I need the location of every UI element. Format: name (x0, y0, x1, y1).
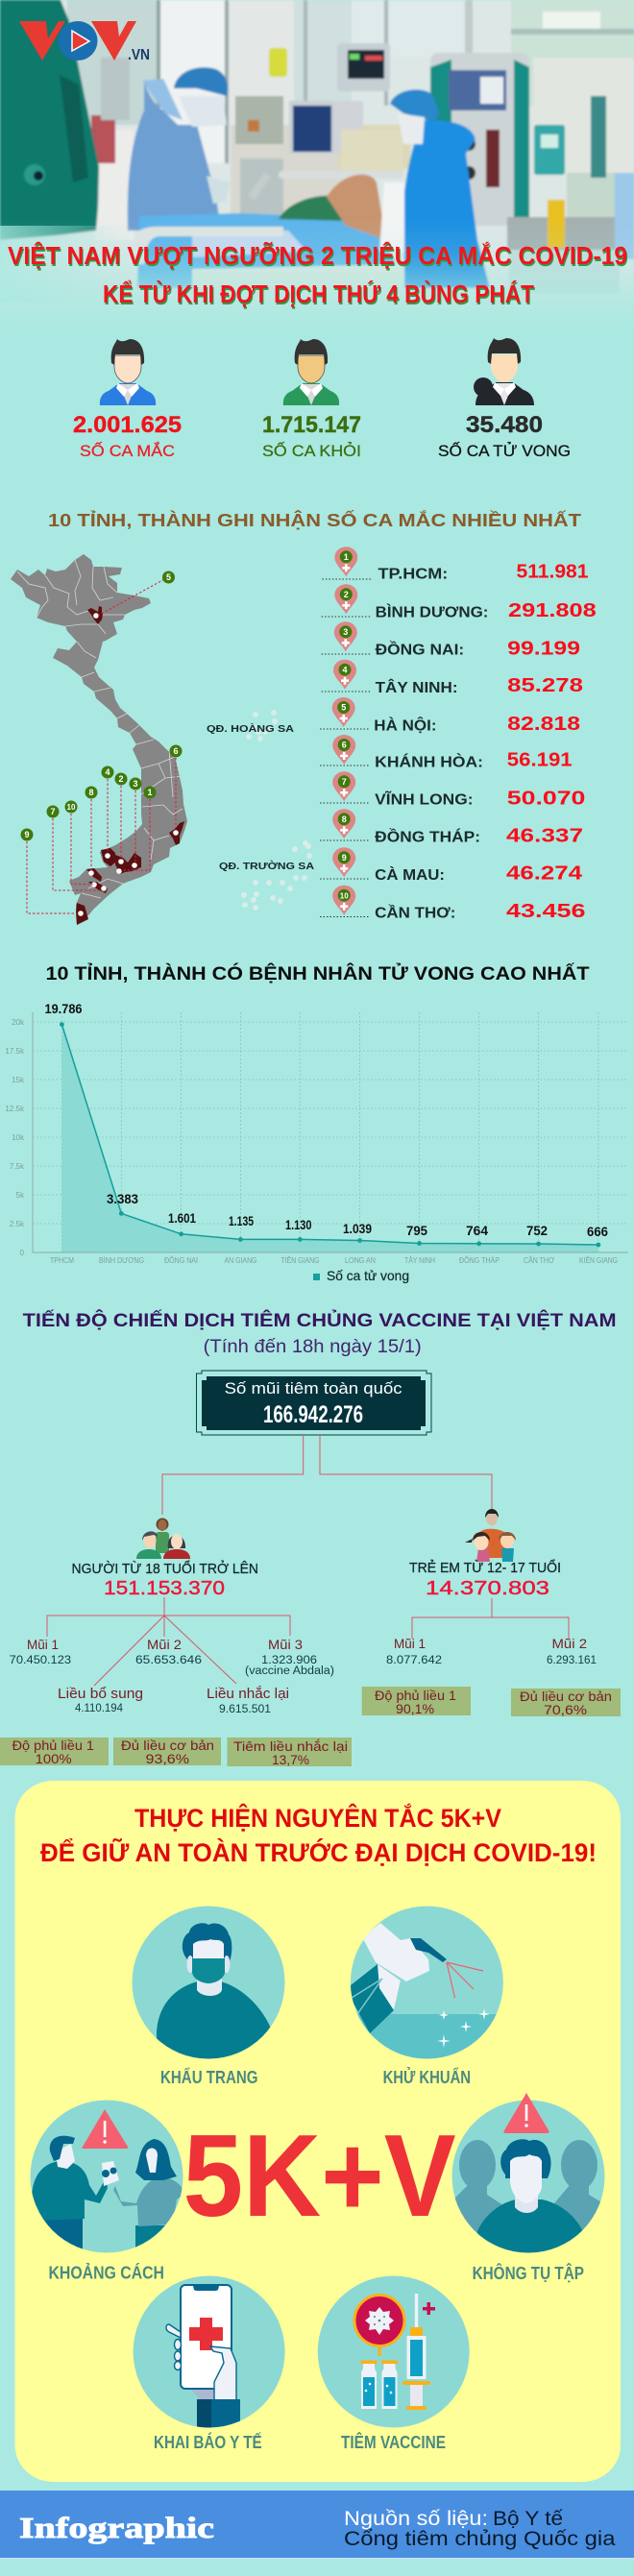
adults dose breakdown: Mũi 3 (268, 1637, 303, 1652)
y axis labels (5, 1018, 25, 1257)
coverage box: adults first dose (0, 1738, 109, 1766)
syringe (402, 2294, 430, 2410)
map of Vietnam with highlighted provinces: 1 (147, 788, 153, 797)
y axis labels: 12.5k (5, 1105, 25, 1113)
children total: 14.370.803 (426, 1578, 549, 1599)
icon: recovered person (283, 339, 339, 405)
province markers (78, 613, 179, 916)
map outline (11, 554, 187, 925)
bed sheet and rail (137, 213, 396, 288)
label: health declaration: KHAI BÁO Y TẾ (154, 2432, 262, 2452)
row 1 (322, 547, 588, 583)
connector lines: vaccination tree (47, 1435, 569, 1686)
legend: Số ca tử vong (327, 1268, 409, 1283)
row 3 (322, 621, 580, 659)
map of Vietnam with highlighted provinces: 5 (166, 572, 171, 582)
coverage box: adults full dose: 93,6% (146, 1751, 189, 1766)
total doses box: 166.942.276 (263, 1401, 363, 1428)
row 2: 291.808 (508, 600, 597, 621)
map of Vietnam with highlighted provinces: 2 (118, 774, 124, 784)
x axis labels: BÌNH DƯƠNG (99, 1256, 144, 1265)
coverage box: adults booster: Tiêm liều nhắc lại (233, 1738, 348, 1754)
data labels: 3.383 (107, 1191, 138, 1206)
markers (60, 1022, 600, 1247)
adults dose breakdown: 1.323.906 (261, 1655, 317, 1666)
x axis labels (50, 1255, 618, 1265)
y axis labels: 2.5k (10, 1220, 25, 1228)
data labels (44, 1001, 608, 1239)
coverage box: adults full dose (113, 1738, 221, 1766)
area chart: deaths by province (5, 1001, 628, 1283)
icon: mourner in black (474, 338, 534, 405)
stat: deaths (438, 338, 571, 460)
row 7: 50.070 (507, 788, 585, 809)
children label: TRẺ EM TỪ 12- 17 TUỔI (409, 1559, 561, 1576)
province borders (17, 560, 183, 898)
islands: Hoàng Sa (207, 710, 294, 741)
y axis labels: 10k (12, 1133, 25, 1142)
islands: Trường Sa: QĐ. TRƯỜNG SA (219, 860, 314, 872)
coverage box: children full dose (511, 1689, 621, 1717)
row 9: 9 (342, 853, 347, 863)
icon: keep distance (31, 2100, 184, 2257)
row 10: 10 (340, 891, 349, 900)
row 10: CẦN THƠ: (375, 904, 455, 922)
x axis labels: AN GIANG (225, 1256, 257, 1265)
children dose breakdown: Mũi 1 (394, 1636, 426, 1651)
data labels: 666 (587, 1224, 608, 1239)
islands: Trường Sa (219, 840, 314, 911)
data labels: 1.039 (343, 1221, 372, 1236)
coverage box: children full dose: 70,6% (544, 1702, 587, 1717)
list: top 10 provinces by cases (320, 547, 597, 922)
x axis labels: TIỀN GIANG (280, 1255, 319, 1265)
data labels: 795 (406, 1223, 427, 1238)
row 6 (320, 735, 573, 771)
row 3: 99.199 (507, 638, 580, 659)
x axis labels: LONG AN (345, 1256, 376, 1265)
children dose breakdown: Mũi 2 (551, 1636, 587, 1651)
row 1: 1 (344, 552, 349, 562)
adults dose breakdown: 9.615.501 (219, 1704, 271, 1715)
children dose breakdown: 8.077.642 (386, 1655, 442, 1666)
coverage box: adults booster: 13,7% (272, 1752, 309, 1767)
row 5: 82.818 (507, 714, 580, 735)
x axis labels: KIÊN GIANG (579, 1256, 618, 1265)
total doses box (196, 1371, 431, 1435)
footer: source: Cổng tiêm chủng Quốc gia (344, 2528, 616, 2550)
stat: recovered: 1.715.147 (262, 412, 361, 438)
data labels: 1.601 (168, 1210, 196, 1226)
row 7: VĨNH LONG: (375, 790, 473, 809)
stat: recovered (262, 339, 361, 460)
footer: source: Bộ Y tế (493, 2508, 563, 2530)
adults dose breakdown: 70.450.123 (10, 1655, 71, 1666)
row 1: 511.981 (517, 562, 588, 583)
label: mask: KHẨU TRANG (160, 2067, 257, 2087)
row 8 (320, 809, 583, 846)
logo: VOV.VN (19, 21, 150, 63)
coverage box: children first dose: Độ phủ liều 1 (375, 1688, 456, 1703)
footer: source: Nguồn số liệu: (344, 2508, 488, 2530)
row 8: ĐỒNG THÁP: (375, 828, 480, 846)
row 4 (322, 660, 583, 696)
adults dose breakdown: (vaccine Abdala) (245, 1665, 334, 1677)
data labels: 1.135 (229, 1213, 254, 1228)
title: KỂ TỪ KHI ĐỢT DỊCH THỨ 4 BÙNG PHÁT (103, 279, 534, 308)
row 5 (320, 697, 580, 735)
coverage box: adults first dose: Độ phủ liều 1 (12, 1738, 94, 1753)
children dose breakdown: 6.293.161 (547, 1655, 597, 1666)
icon: disinfect spray (346, 1906, 509, 2062)
row 6: 6 (342, 741, 347, 750)
map of Vietnam with highlighted provinces: 10 (67, 803, 76, 812)
x axis labels: ĐỒNG THÁP (459, 1255, 500, 1265)
logo: VOV.VN: .VN (128, 47, 150, 63)
stat: cases: SỐ CA MẮC (80, 441, 175, 460)
row 5: HÀ NỘI: (374, 717, 436, 735)
y axis labels: 15k (12, 1076, 25, 1084)
map of Vietnam with highlighted provinces: 7 (50, 807, 56, 816)
stat: deaths: 35.480 (466, 412, 543, 438)
row 1: TP.HCM: (378, 567, 448, 583)
row 3: 3 (343, 627, 348, 637)
row 3: ĐỒNG NAI: (376, 641, 464, 659)
adults dose breakdown: Mũi 1 (27, 1637, 59, 1652)
icon: health declaration phone (134, 2276, 285, 2430)
children dose breakdown (386, 1636, 597, 1666)
heading: top 10 deaths: 10 TỈNH, THÀNH CÓ BỆNH NHÂN TỬ VONG CAO NHẤT (46, 961, 590, 984)
vials (361, 2361, 398, 2409)
label: no gathering: KHÔNG TỤ TẬP (473, 2263, 584, 2283)
adults dose breakdown: Liều nhắc lại (207, 1686, 289, 1702)
area fill (61, 1025, 598, 1252)
row 9: 46.274 (506, 863, 583, 885)
row 8: 46.337 (506, 825, 583, 846)
footer: Infographic: Infographic (19, 2511, 214, 2544)
coverage box: adults first dose: 100% (36, 1751, 72, 1766)
title (8, 241, 627, 308)
y axis labels: 20k (12, 1018, 25, 1027)
islands: Hoàng Sa: QĐ. HOÀNG SA (207, 722, 294, 735)
label: vaccine: TIÊM VACCINE (341, 2432, 446, 2452)
coverage box: children first dose: 90,1% (396, 1701, 434, 1716)
numbered badges (21, 571, 183, 841)
x axis labels: CẦN THƠ (524, 1255, 554, 1265)
hero photo: ICU doctors treating a patient (0, 0, 634, 334)
panel heading: THỰC HIỆN NGUYÊN TẮC 5K+V (134, 1803, 501, 1833)
map of Vietnam with highlighted provinces: 4 (105, 767, 110, 777)
map of Vietnam with highlighted provinces: 8 (88, 788, 94, 797)
map of Vietnam with highlighted provinces: 6 (173, 746, 179, 756)
row 6: 56.191 (507, 750, 573, 771)
row 10 (320, 886, 586, 922)
line (61, 1025, 598, 1245)
icon: adults group (136, 1518, 190, 1559)
row 7: 7 (342, 777, 347, 787)
highlighted provinces (76, 606, 184, 925)
y axis labels: 5k (16, 1191, 25, 1200)
x axis labels: ĐỒNG NAI (164, 1255, 198, 1265)
y axis labels: 0 (20, 1249, 25, 1257)
panel: 5K+V rule (15, 1781, 621, 2482)
x axis labels: TÂY NINH (404, 1256, 435, 1265)
data labels: 752 (526, 1223, 548, 1238)
row 8: 8 (342, 814, 347, 824)
footer band (0, 2491, 634, 2559)
panel heading: ĐỂ GIỮ AN TOÀN TRƯỚC ĐẠI DỊCH COVID-19! (40, 1837, 597, 1867)
label: distance: KHOẢNG CÁCH (48, 2263, 164, 2283)
icon: mask (133, 1906, 284, 2065)
big 5K+V: 5K+V (183, 2110, 456, 2241)
coverage box: children first dose (362, 1687, 471, 1716)
adults dose breakdown: Liều bổ sung (58, 1686, 143, 1702)
adults dose breakdown (10, 1637, 334, 1715)
data labels: 764 (466, 1223, 488, 1238)
row 5: 5 (341, 703, 346, 713)
label: disinfect: KHỬ KHUẨN (383, 2067, 471, 2087)
stat: deaths: SỐ CA TỬ VONG (438, 441, 571, 460)
heading: vaccination progress: TIẾN ĐỘ CHIẾN DỊCH TIÊM CHỦNG VACCINE TẠI VIỆT NAM (23, 1308, 617, 1331)
adults label: NGƯỜI TỪ 18 TUỔI TRỞ LÊN (71, 1560, 258, 1577)
map of Vietnam with highlighted provinces (11, 554, 187, 925)
row 2: 2 (344, 590, 349, 599)
data labels: 19.786 (44, 1001, 83, 1016)
icon: infected person (100, 339, 156, 405)
row 2 (322, 584, 597, 621)
row 4: 4 (342, 665, 348, 674)
footer: source (344, 2508, 616, 2550)
row 9 (320, 847, 583, 885)
row 9: CÀ MAU: (375, 865, 445, 884)
coverage box: adults full dose: Đủ liều cơ bản (121, 1738, 214, 1753)
coverage box: adults booster (227, 1738, 352, 1767)
heading: top 10 cases: 10 TỈNH, THÀNH GHI NHẬN SỐ CA MẮC NHIỀU NHẤT (48, 510, 581, 530)
row 2: BÌNH DƯƠNG: (376, 602, 488, 620)
y axis labels: 17.5k (5, 1047, 25, 1056)
icon: no gathering (451, 2093, 605, 2253)
row 4: 85.278 (507, 675, 583, 696)
heading: vaccination progress: (Tính đến 18h ngày 15/1) (204, 1337, 422, 1357)
hero fade into background (0, 219, 634, 334)
heading: vaccination progress (23, 1308, 617, 1357)
stat: cases (73, 339, 182, 460)
panel heading (40, 1803, 597, 1867)
leader lines (27, 577, 176, 913)
adults dose breakdown: Mũi 2 (147, 1637, 182, 1652)
stat: recovered: SỐ CA KHỎI (262, 441, 361, 460)
y axis labels: 7.5k (10, 1162, 25, 1171)
row 10: 43.456 (506, 901, 586, 922)
icon: children group (465, 1509, 516, 1562)
x axis labels: TPHCM (50, 1256, 74, 1265)
coverage box: children full dose: Đủ liều cơ bản (520, 1689, 612, 1704)
map of Vietnam with highlighted provinces: 3 (133, 779, 138, 789)
adults dose breakdown: 65.653.646 (135, 1655, 202, 1666)
stat: cases: 2.001.625 (73, 412, 182, 438)
adults total: 151.153.370 (104, 1578, 225, 1599)
row 4: TÂY NINH: (376, 678, 457, 696)
data labels: 1.130 (285, 1217, 312, 1232)
row 6: KHÁNH HÒA: (375, 752, 483, 770)
total doses box: Số mũi tiêm toàn quốc (225, 1379, 402, 1397)
adults dose breakdown: 4.110.194 (75, 1703, 124, 1714)
map of Vietnam with highlighted provinces: 9 (24, 830, 30, 839)
row 7 (320, 771, 585, 809)
icon: vaccine (318, 2276, 470, 2428)
